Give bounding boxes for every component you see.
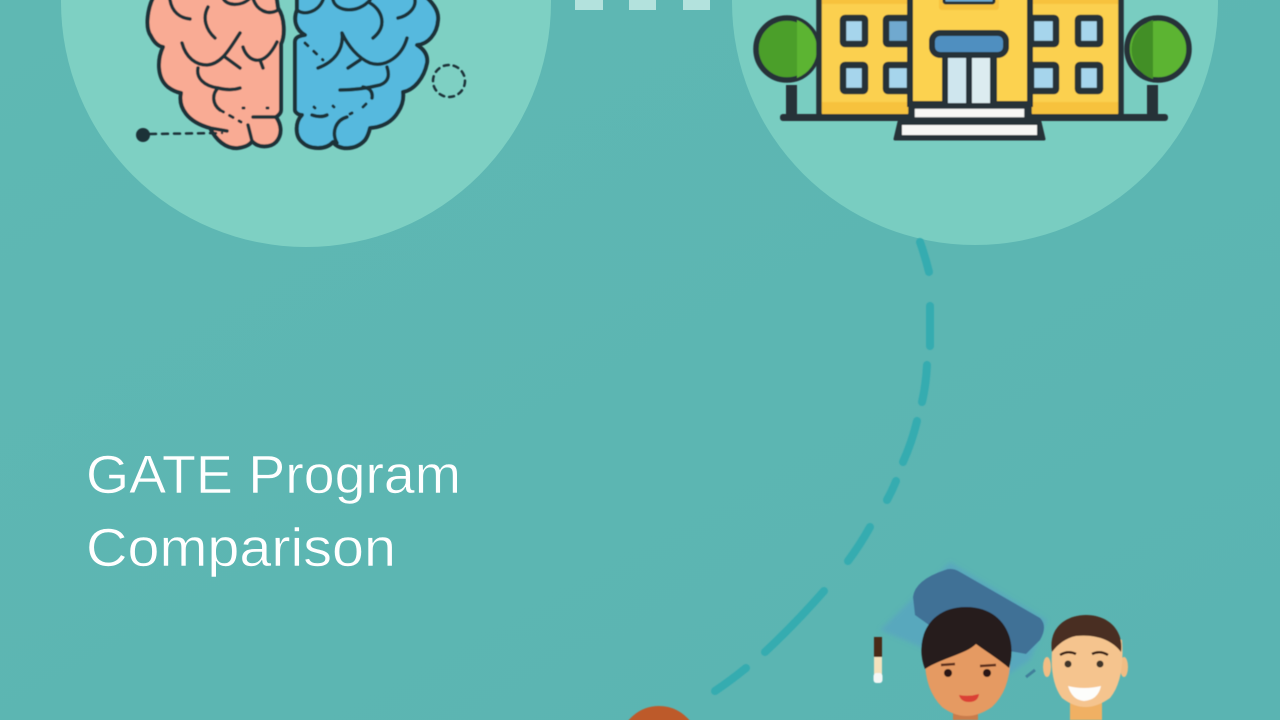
pagination squares (575, 0, 710, 10)
left hemisphere (148, 0, 284, 148)
right hemisphere (295, 0, 438, 148)
left tree (756, 18, 818, 119)
circle backdrop: school (732, 0, 1218, 245)
panel: brain circle (61, 0, 551, 247)
graduation cap (880, 562, 1047, 680)
panel: school circle (732, 0, 1218, 245)
man (1043, 615, 1128, 720)
left wing (819, 0, 911, 116)
steps (895, 106, 1044, 139)
circle backdrop: brain (61, 0, 551, 247)
tassel (874, 637, 882, 683)
icon: school building (756, 0, 1189, 139)
central block (910, 0, 1030, 104)
dashed pointer line (150, 133, 222, 134)
title: GATE Program (86, 445, 461, 505)
third graduate head (627, 706, 691, 720)
icon: brain (137, 0, 465, 148)
dashed connector path (715, 242, 930, 691)
entrance (932, 33, 1006, 104)
right tree (1127, 18, 1189, 119)
woman (921, 607, 1012, 720)
dashed circle (433, 65, 465, 97)
windows (843, 18, 1100, 91)
illustration: graduates (627, 562, 1128, 720)
pointer dot (137, 129, 149, 141)
ground line (780, 114, 1168, 121)
right wing (1029, 0, 1121, 116)
title: Comparison (86, 518, 396, 578)
